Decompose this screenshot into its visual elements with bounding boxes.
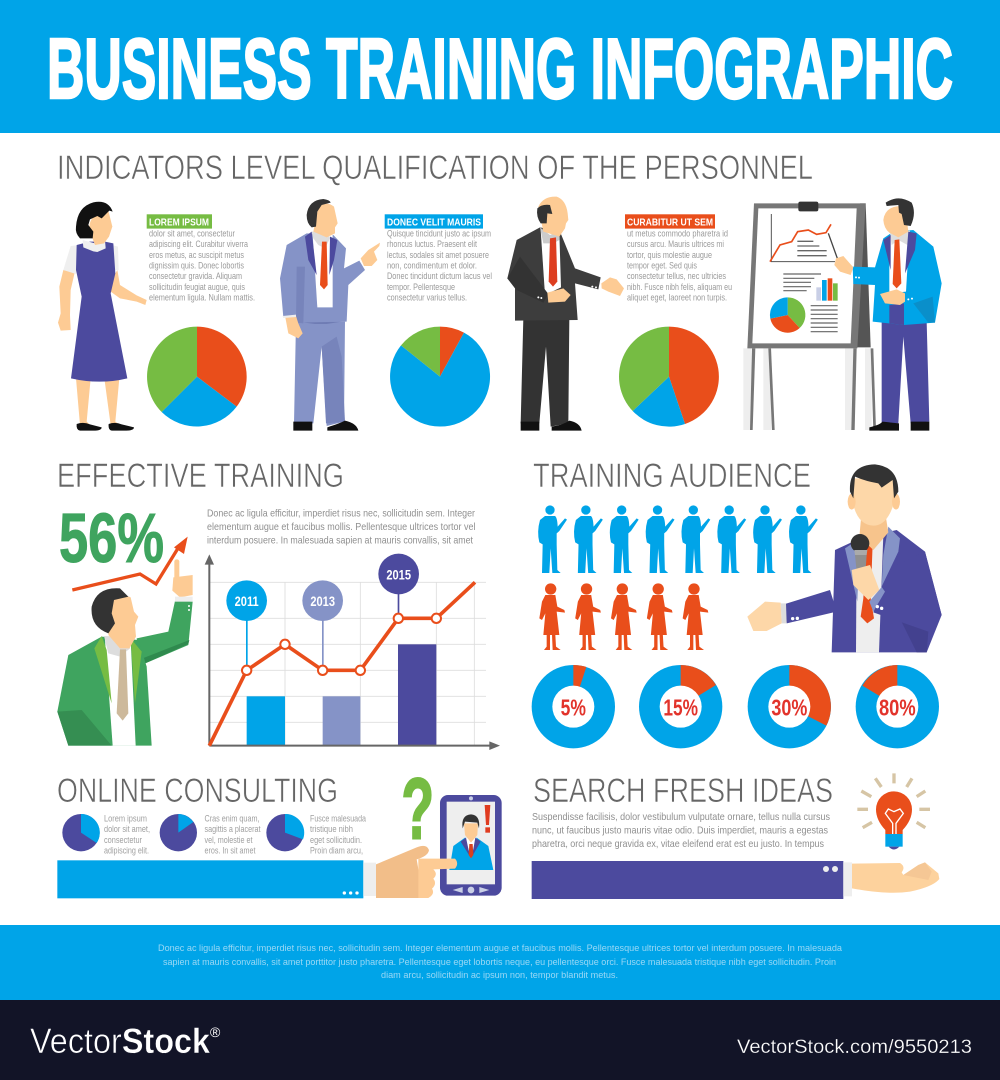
text block: search fresh ideas: pharetra, orci neque gravida ex, vitae eleifend erat est eu justo. In tempus xyxy=(532,838,824,850)
phone: man on screen xyxy=(449,814,493,870)
pictogram row: men xyxy=(538,505,818,573)
text block 2: Quisque tincidunt justo ac ipsum xyxy=(387,228,491,240)
bubble: 2011: 2011 xyxy=(235,593,259,609)
chart grid xyxy=(209,582,486,746)
text block: online col 3 xyxy=(310,814,366,856)
flipchart mini pie xyxy=(770,297,838,333)
bubble: 2011 xyxy=(226,580,267,667)
text block: online col 1 xyxy=(104,814,150,856)
text block: online col 2: vel, molestie et xyxy=(204,835,253,845)
text block 3: cursus arcu. Mauris ultrices mi xyxy=(627,239,724,250)
arrow: rising trend xyxy=(72,537,188,590)
text block 2: rhoncus luctus. Praesent elit xyxy=(387,239,477,250)
figure: man in blue jacket xyxy=(834,198,942,431)
text block 3: tortor, quis molestie augue xyxy=(627,250,712,261)
label: lorem ipsum: LOREM IPSUM xyxy=(149,216,209,228)
figure: man in green jacket pointing up xyxy=(57,559,193,746)
hand pointing xyxy=(376,846,457,898)
heading: online consulting: ONLINE CONSULTING xyxy=(57,772,338,810)
flipchart line chart xyxy=(770,214,835,262)
footer text: diam arcu, sollicitudin ac ipsum non, tempor blandit metus. xyxy=(381,970,618,981)
heading: search fresh ideas: SEARCH FRESH IDEAS xyxy=(533,772,833,810)
text block: online col 2: eros. In sit amet xyxy=(204,846,256,856)
text block: effective training: interdum posuere. In malesuada sapien at mauris convallis, sit amet xyxy=(207,534,473,546)
figure: man in black suit xyxy=(507,197,624,431)
footer text: Donec ac ligula efficitur, imperdiet risus nec, sollicitudin sem. Integer elementum augue et faucibus mollis. Pellentesque ultrices tortor vel interdum posuere. In malesuada xyxy=(158,943,843,954)
text block: online col 3: eget sollicitudin. xyxy=(310,835,362,845)
panel: training audience graphics xyxy=(532,464,942,748)
text block 1: adipiscing elit. Curabitur viverra xyxy=(149,239,249,250)
text block 3: consectetur tellus, nec ultricies xyxy=(627,271,726,282)
text block 1: dignissim quis. Donec lobortis xyxy=(149,260,244,272)
text block: online col 1: adipiscing elit. xyxy=(104,846,149,856)
mini pie 2 xyxy=(160,814,197,851)
purple sleeve bar xyxy=(532,861,852,899)
watermark band xyxy=(0,1000,1000,1080)
panel: effective training graphics xyxy=(57,537,500,750)
text block: online col 2 xyxy=(204,814,261,856)
chart axes xyxy=(205,554,500,750)
panel: indicators right half xyxy=(507,197,942,431)
donut: 80% xyxy=(856,665,939,748)
donut: 80%: 80% xyxy=(879,694,916,720)
question mark: ? xyxy=(401,762,434,858)
pie chart 2 xyxy=(390,327,490,427)
donut: 15% xyxy=(639,665,722,748)
label: curabitur ut sem: CURABITUR UT SEM xyxy=(627,216,713,228)
watermark registered mark: ® xyxy=(210,1024,221,1040)
panel: search fresh ideas graphics xyxy=(532,773,939,899)
icon: light bulb xyxy=(857,773,930,849)
text block: effective training: Donec ac ligula efficitur, imperdiet risus nec, sollicitudin sem. Integer xyxy=(207,508,475,520)
text block: online col 2: sagittis a placerat xyxy=(204,824,261,834)
text block 3: nibh. Fusce nibh felis, aliquam eu xyxy=(627,282,732,293)
bubble: 2015: 2015 xyxy=(386,566,411,582)
footer band xyxy=(0,925,1000,1000)
panel: indicators left half xyxy=(58,199,490,431)
blue sleeve bar xyxy=(57,860,376,898)
text block: search fresh ideas: nunc, ut faucibus justo mauris vitae odio. Duis imperdiet, mauris a egestas xyxy=(532,824,828,836)
text block 2: consectetur varius tellus. xyxy=(387,292,467,304)
donut: 30%: 30% xyxy=(771,694,807,720)
text block: effective training xyxy=(207,508,476,546)
text block: online col 1: Lorem ipsum xyxy=(104,814,147,824)
text block: search fresh ideas: Suspendisse facilisis, dolor vestibulum vulputate ornare, tellus nulla cursus xyxy=(532,811,830,823)
text block 2: lectus, sodales sit amet posuere xyxy=(387,250,489,261)
text block 3 xyxy=(627,228,732,304)
bubble: 2015 xyxy=(378,554,419,615)
text block: effective training: elementum augue et faucibus mollis. Pellentesque ultrices tortor vel xyxy=(207,521,476,533)
header band xyxy=(0,0,1000,133)
phone: exclamation mark xyxy=(485,805,490,833)
trend line xyxy=(209,582,475,746)
text block: online col 2: Cras enim quam, xyxy=(204,814,260,824)
mini pie 3 xyxy=(266,814,304,851)
footer text xyxy=(158,943,843,981)
figure: man in lilac suit xyxy=(280,199,380,431)
figure: woman in purple dress xyxy=(58,202,147,431)
text block: online col 1: dolor sit amet, xyxy=(104,824,150,834)
pictogram row: women xyxy=(539,583,708,650)
text block: online col 3: Fusce malesuada xyxy=(310,814,366,824)
flipchart easel xyxy=(743,202,876,430)
bubble: 2013: 2013 xyxy=(310,593,335,609)
panel: online consulting graphics xyxy=(57,762,502,898)
footer text: sapien at mauris convallis, sit amet porttitor justo pharetra. Pellentesque eget lobortis neque, eu pellentesque orci. Fusce malesuada tristique nibh eget sollicitudin. Proin xyxy=(163,957,836,968)
watermark url: VectorStock.com/9550213 xyxy=(737,1037,972,1058)
pie chart 1 xyxy=(147,327,247,426)
text block: search fresh ideas xyxy=(532,811,830,850)
big stat: 56%: 56% xyxy=(59,499,164,577)
hand open palm xyxy=(852,862,939,893)
donut: 15%: 15% xyxy=(663,694,698,720)
text block 3: aliquet eget, laoreet non turpis. xyxy=(627,292,727,304)
bubble: 2013 xyxy=(302,580,343,667)
text block 2 xyxy=(387,228,492,304)
donut: 5%: 5% xyxy=(561,694,586,720)
heading: indicators: INDICATORS LEVEL QUALIFICATION OF THE PERSONNEL xyxy=(57,149,813,187)
bars xyxy=(247,644,436,746)
figure: presenter with microphone xyxy=(747,464,942,652)
text block 2: non, condimentum et dolor. xyxy=(387,260,477,272)
text block: online col 1: consectetur xyxy=(104,835,142,845)
text block 1: consectetur gravida. Aliquam xyxy=(149,271,242,282)
label: donec velit mauris: DONEC VELIT MAURIS xyxy=(387,216,481,228)
text block 3: ut metus commodo pharetra id xyxy=(627,228,728,240)
icon: phone xyxy=(440,795,502,896)
text block 2: tempor. Pellentesque xyxy=(387,282,455,293)
watermark logo: VectorStock xyxy=(30,1022,210,1061)
heading: training audience: TRAINING AUDIENCE xyxy=(533,457,811,495)
flipchart text lines and bars xyxy=(783,274,838,301)
donut: 30% xyxy=(748,665,831,748)
pie chart 3 xyxy=(619,327,719,427)
text block 3: tempor eget. Sed quis xyxy=(627,260,697,272)
text block 1: elementum ligula. Nullam mattis. xyxy=(149,292,255,304)
text block 1: dolor sit amet, consectetur xyxy=(149,228,235,240)
text block 2: Donec tincidunt dictum lacus vel xyxy=(387,271,492,282)
text block 1: eros metus, ac suscipit metus xyxy=(149,250,244,261)
text block: online col 3: Proin diam arcu, xyxy=(310,846,363,856)
heading: effective training: EFFECTIVE TRAINING xyxy=(57,457,344,495)
text block: online col 3: tristique nibh xyxy=(310,824,353,834)
donut: 5% xyxy=(532,665,615,748)
mini pie 1 xyxy=(62,814,100,851)
text block 1 xyxy=(149,228,255,304)
text block 1: sollicitudin feugiat augue, quis xyxy=(149,282,245,293)
